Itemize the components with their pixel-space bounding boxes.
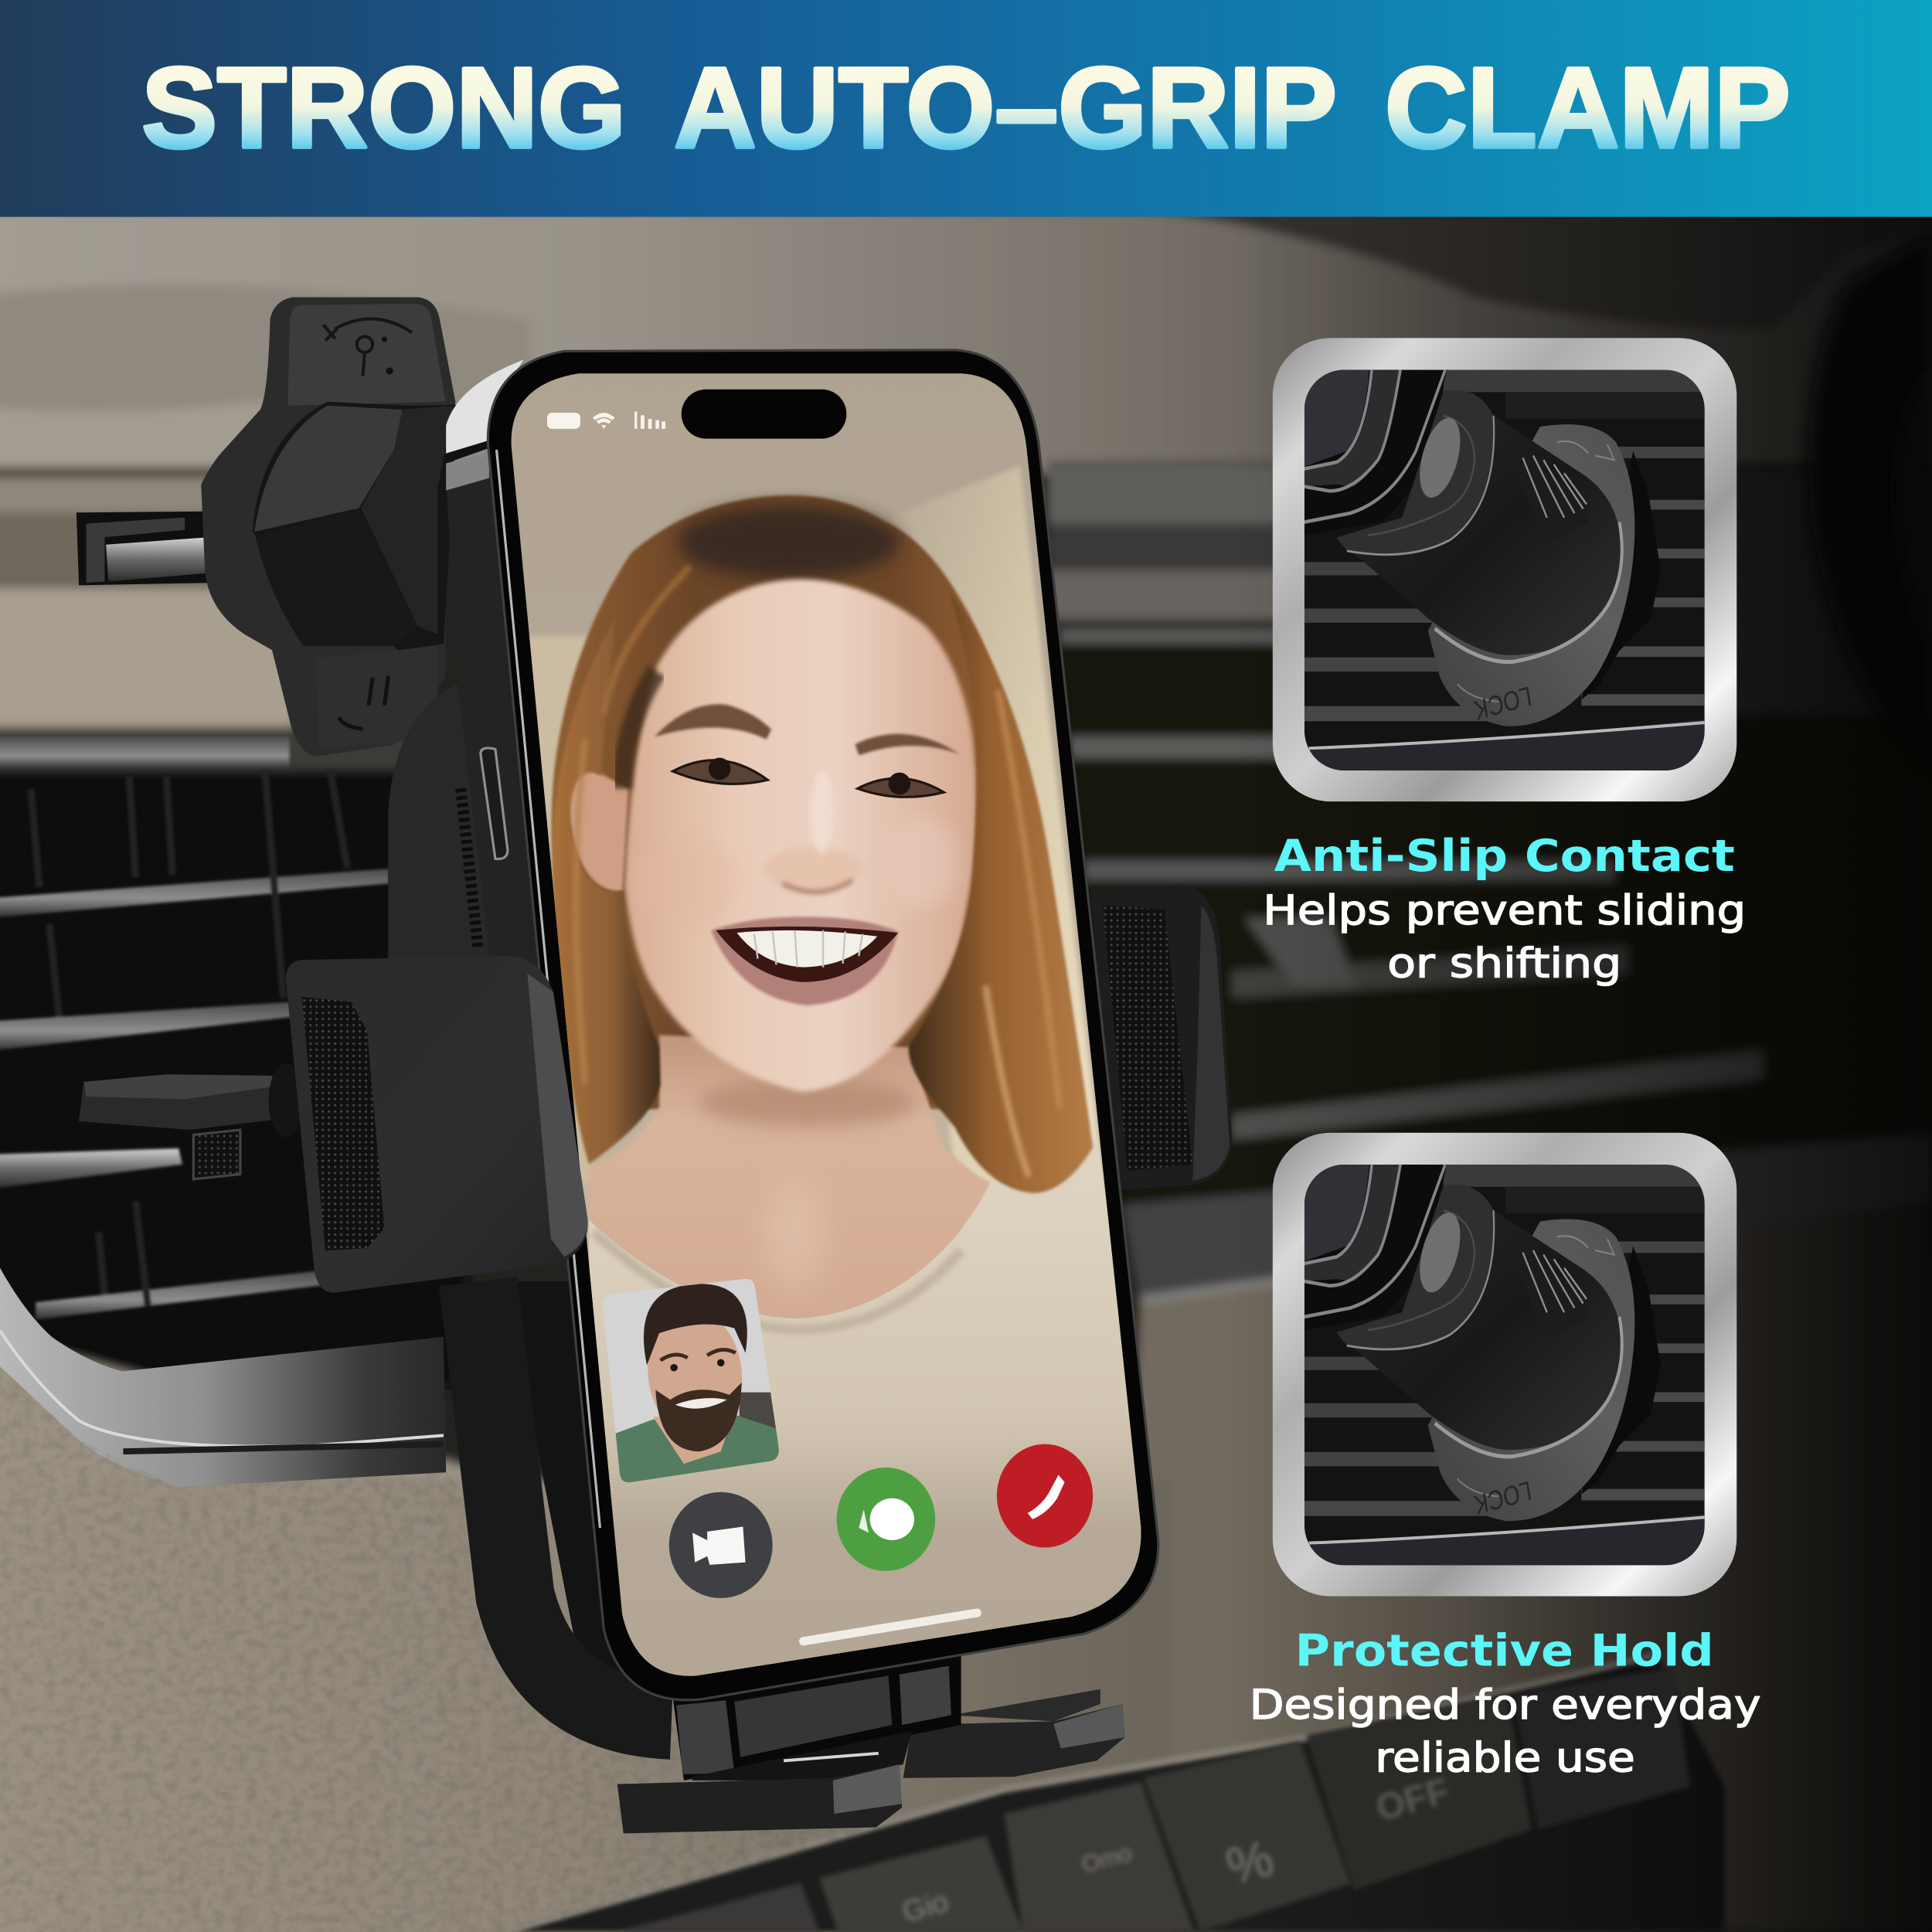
phone body [488, 350, 1158, 1700]
dashboard buttons: Omo [1079, 1840, 1134, 1878]
title: AUTO–GRIP [674, 45, 1337, 172]
phone mount [77, 298, 1232, 1833]
leather texture [0, 1343, 887, 1932]
title [141, 45, 1791, 172]
feature heading: Anti-Slip Contact [1274, 830, 1735, 882]
vent clip lower [79, 1063, 303, 1179]
feature description: Designed for everyday [1250, 1682, 1760, 1729]
inset photo: clamp detail [1273, 338, 1736, 801]
face [624, 579, 977, 1092]
video button [669, 1492, 773, 1598]
shirt [589, 1141, 1141, 1676]
dashboard buttons [616, 1667, 1691, 1932]
ear [568, 759, 628, 891]
feature description [1263, 887, 1746, 987]
title: STRONG [141, 45, 626, 172]
status icons [547, 412, 665, 429]
picture in picture: man [591, 1269, 788, 1491]
title: CLAMP [1385, 45, 1791, 172]
lower arm [478, 1281, 672, 1720]
feature panel: protective hold [1250, 1133, 1760, 1782]
clamp grip pad [302, 997, 384, 1250]
hair front locks [552, 591, 1093, 1193]
nose [764, 771, 862, 892]
dial at right [1809, 234, 1932, 770]
dynamic island [682, 389, 846, 439]
vent clip upper [77, 512, 212, 585]
inset photo: clamp detail [1273, 1133, 1736, 1597]
phone edge highlight [497, 450, 600, 1528]
feature panel: anti-slip contact [1263, 338, 1746, 987]
right side clamp [1090, 885, 1232, 1190]
phone side and buttons [446, 360, 530, 986]
rear arm [388, 680, 505, 986]
feature description: Helps prevent sliding [1263, 887, 1746, 934]
top knob [201, 298, 457, 757]
eyes [673, 758, 944, 797]
feature heading: Protective Hold [1295, 1625, 1714, 1677]
neck and chest [589, 1035, 991, 1318]
vent slats [0, 736, 389, 1320]
eyebrows [655, 704, 771, 740]
dashboard buttons: % [1220, 1828, 1280, 1896]
smartphone [488, 350, 1183, 1700]
chrome vent trim [0, 1268, 446, 1487]
bottom feet [617, 1651, 1125, 1833]
dashboard buttons: OFF [1372, 1770, 1454, 1829]
dashboard buttons: Gio [899, 1885, 952, 1929]
home indicator [804, 1613, 977, 1641]
feature description: reliable use [1375, 1735, 1635, 1782]
woman [552, 495, 1183, 1700]
feature description: or shifting [1387, 940, 1621, 987]
clamp edge highlight [527, 974, 588, 1257]
left gripping clamp [286, 956, 588, 1293]
screen: video call [512, 373, 1141, 1676]
header banner [0, 0, 1932, 217]
smile [711, 917, 898, 1005]
end call button [997, 1444, 1093, 1548]
feature description [1250, 1682, 1760, 1782]
mute button [837, 1468, 935, 1571]
